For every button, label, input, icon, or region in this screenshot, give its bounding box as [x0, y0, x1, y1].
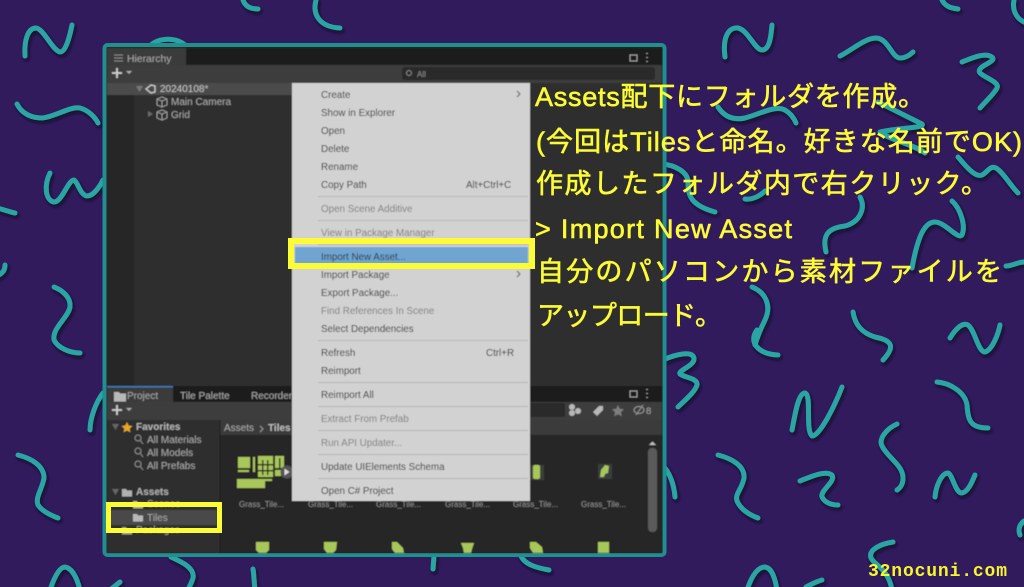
panel: Project: Scenes	[147, 499, 180, 510]
panel: Project: Packages	[136, 525, 180, 536]
text block: instructions: (今回はTilesと命名。好きな名前でOK)	[536, 127, 1022, 157]
context menu: Rename	[321, 162, 359, 173]
context menu: Reimport All	[321, 390, 374, 401]
context menu: Reimport	[321, 366, 361, 377]
panel: Project: Tiles	[147, 513, 168, 524]
asset thumbnails: Grass_Tile...	[581, 500, 626, 509]
asset thumbnails: Grass_Tile...	[445, 500, 490, 509]
panel: Hierarchy: All	[417, 70, 426, 79]
asset thumbnails	[237, 456, 626, 553]
site credit: 32nocuni.com	[868, 562, 1007, 582]
context menu: Extract From Prefab	[321, 414, 409, 425]
asset thumbnails: Grass_Tile...	[513, 500, 558, 509]
asset thumbnails: Grass_Tile...	[239, 500, 284, 509]
panel frame	[104, 45, 664, 555]
context menu: Create	[321, 90, 351, 101]
context menu: Find References In Scene	[321, 306, 435, 317]
panel: Hierarchy	[107, 48, 662, 386]
context menu: Open C# Project	[321, 486, 394, 497]
panel: Project: All Materials	[147, 435, 201, 446]
panel: Project: Tile Palette	[180, 391, 230, 402]
context menu	[292, 83, 530, 501]
panel: Project: 8	[646, 406, 651, 417]
panel: Hierarchy: Hierarchy	[127, 54, 172, 65]
context menu: Alt+Ctrl+C	[466, 180, 511, 191]
context menu: Export Package...	[321, 288, 398, 299]
context menu: Open Scene Additive	[321, 204, 413, 215]
panel: Hierarchy: Grid	[171, 110, 190, 121]
panel: Project: Assets	[136, 487, 169, 498]
callout box: Tiles folder	[108, 504, 220, 530]
panel: Project	[107, 386, 662, 553]
panel: Project: Project	[127, 391, 158, 402]
panel: Project: Tiles	[268, 423, 291, 434]
text block: instructions: 自分のパソコンから素材ファイルを	[537, 257, 1002, 287]
context menu: Ctrl+R	[486, 348, 514, 359]
context menu: Copy Path	[321, 180, 367, 191]
asset thumbnails: Grass_Tile...	[308, 500, 353, 509]
context menu: Import Package	[321, 270, 390, 281]
panel: Project: Recorder	[251, 391, 293, 402]
context menu: View in Package Manager	[321, 228, 435, 239]
context menu: Run API Updater...	[321, 438, 402, 449]
text block: instructions: 作成したフォルダ内で右クリック。	[536, 169, 988, 199]
text block: instructions: アップロード。	[537, 301, 722, 331]
context menu: Import New Asset...	[321, 252, 406, 263]
context menu: Show in Explorer	[321, 108, 396, 119]
callout box: Import New Asset	[291, 241, 532, 266]
context menu: Select Dependencies	[321, 324, 414, 335]
panel: Project: All Prefabs	[147, 461, 195, 472]
text block: instructions: > Import New Asset	[535, 214, 792, 244]
text block: instructions: Assets配下にフォルダを作成。	[535, 82, 925, 112]
panel: Hierarchy: 20240108*	[160, 84, 208, 95]
context menu: Refresh	[321, 348, 355, 359]
context menu: Delete	[321, 144, 350, 155]
panel: Project: Favorites	[136, 422, 181, 433]
context menu: Update UIElements Schema	[321, 462, 445, 473]
highlighted menu item: Import New Asset	[295, 247, 528, 265]
asset thumbnails: Grass_Tile...	[376, 500, 421, 509]
panel: Hierarchy: Main Camera	[171, 97, 231, 108]
context menu: Open	[321, 126, 345, 137]
text block: instructions	[535, 82, 1022, 331]
panel: Project: All Models	[147, 448, 193, 459]
panel: Unity editor screenshot	[104, 45, 664, 555]
panel: Project: Assets	[224, 423, 254, 434]
